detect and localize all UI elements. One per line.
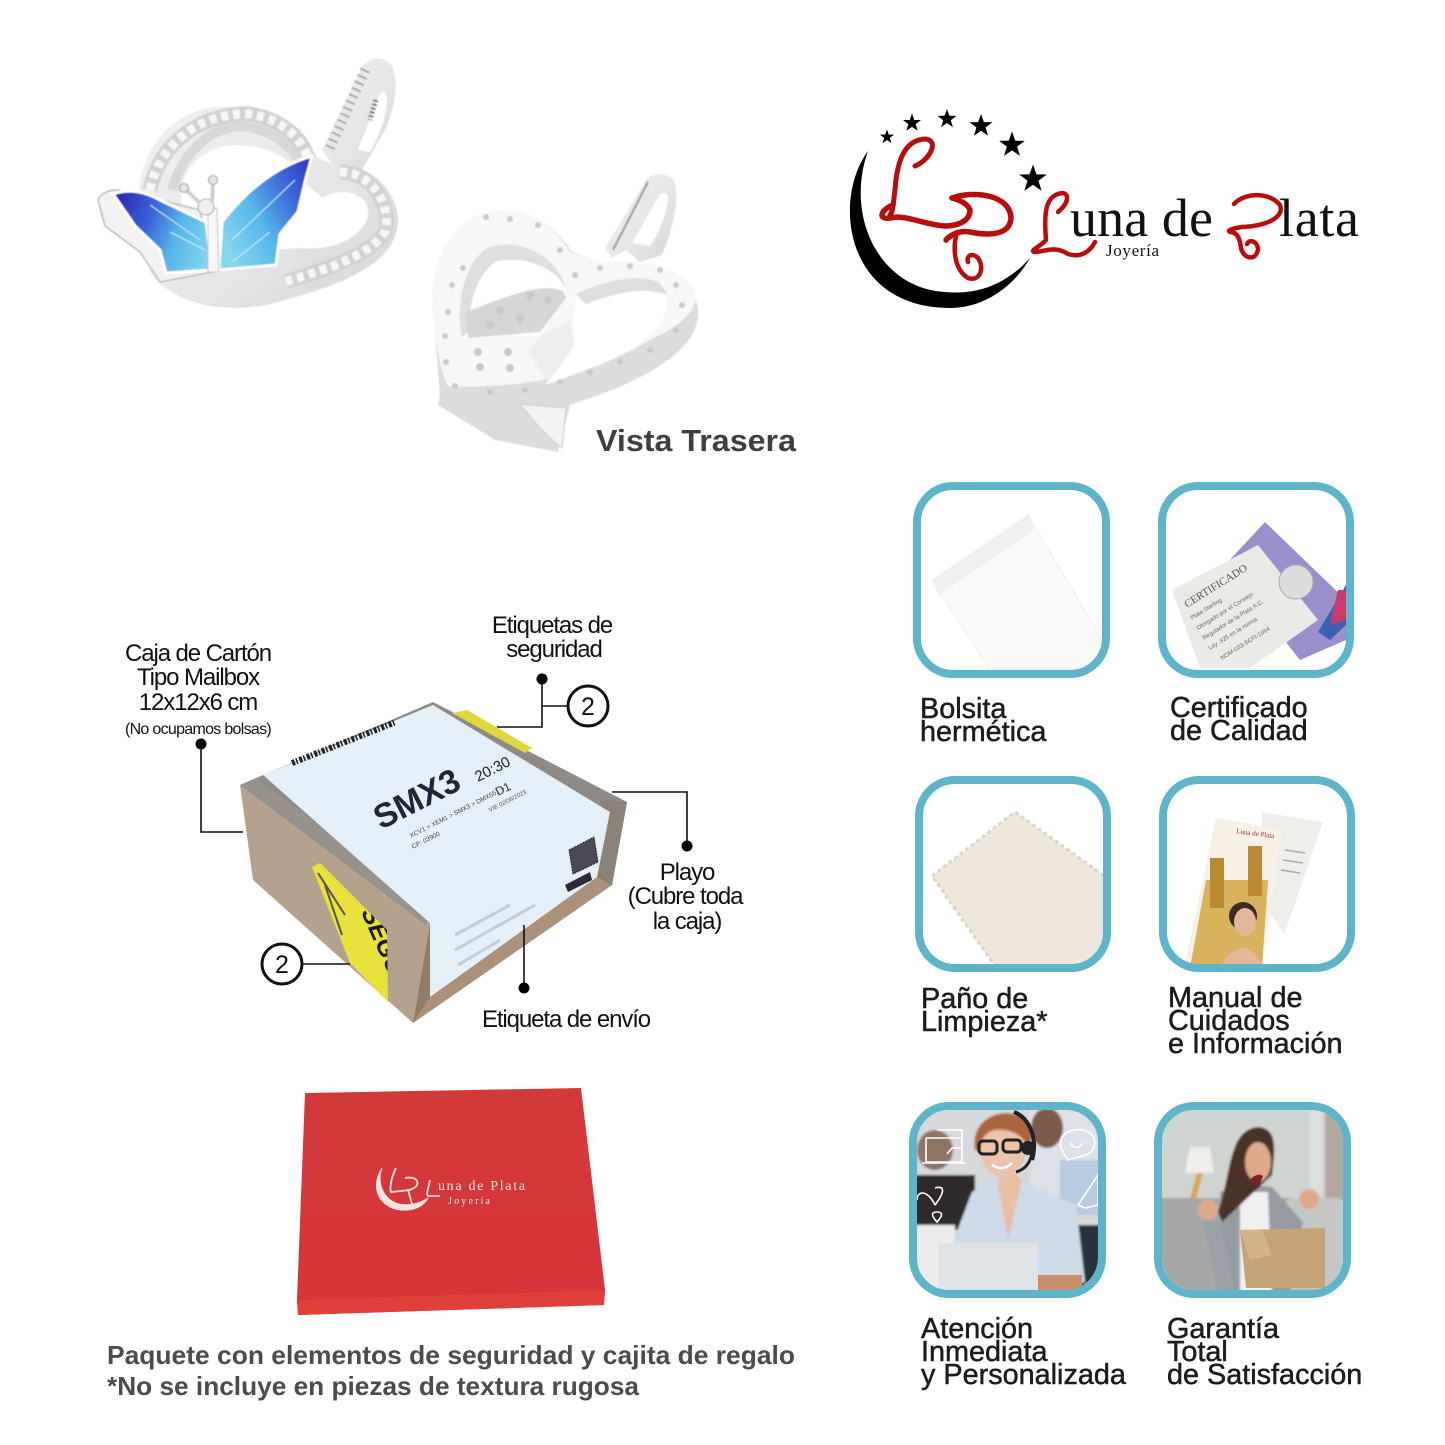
logo: Luna de Plata bbox=[850, 109, 1359, 308]
red gift box bbox=[297, 1088, 605, 1315]
caption: care manual: Cuidados bbox=[1168, 1005, 1290, 1037]
caption: satisfaction guarantee: Garantía bbox=[1167, 1313, 1280, 1345]
caption: personal attention: y Personalizada bbox=[921, 1359, 1127, 1391]
count badge: side sticker: 2 bbox=[275, 951, 289, 979]
tile: certificate: Regulador de la Plata A.C. bbox=[1202, 599, 1265, 642]
caption: cleaning cloth bbox=[921, 983, 1047, 1038]
caption: hermetic bag: Bolsita bbox=[920, 693, 1007, 725]
caption: satisfaction guarantee bbox=[1167, 1313, 1362, 1391]
label: cardboard box: Tipo Mailbox bbox=[137, 664, 260, 691]
caption: personal attention bbox=[921, 1313, 1127, 1391]
caption: certificate: Certificado bbox=[1170, 692, 1308, 724]
logo red monogram LP bbox=[882, 139, 1281, 279]
caption: care manual: e Información bbox=[1168, 1028, 1342, 1060]
label: shipping label: Etiqueta de envío bbox=[482, 1006, 651, 1033]
caption: cleaning cloth: Limpieza* bbox=[921, 1006, 1047, 1038]
label: cardboard box: 12x12x6 cm bbox=[139, 689, 257, 716]
gift box silver logo: Joyería bbox=[448, 1196, 491, 1207]
leader: plastic wrap bbox=[612, 792, 692, 852]
count badge: side sticker bbox=[262, 944, 302, 984]
tile: care manual: Luna de Plata bbox=[1236, 827, 1276, 840]
caption: cleaning cloth: Paño de bbox=[921, 983, 1028, 1015]
logo crescent moon bbox=[850, 151, 1030, 308]
caption: hermetic bag: hermética bbox=[920, 716, 1047, 748]
tile: personal attention photo bbox=[913, 1106, 1102, 1294]
cardboard box photo: XCV1 > XEM1 > SMX3 > DMX551 > bbox=[409, 786, 506, 840]
cardboard box photo: VIE 02/06/2023 bbox=[488, 789, 528, 814]
label: plastic wrap: Playo bbox=[660, 859, 715, 886]
cardboard box photo: SMX3 bbox=[367, 762, 467, 837]
caption: back view: Vista Trasera bbox=[596, 423, 797, 458]
logo tagline: Joyería bbox=[1106, 241, 1159, 260]
tile: certificate bbox=[1162, 486, 1350, 674]
tile: certificate: Plata Sterling bbox=[1190, 598, 1223, 622]
label: security stickers: seguridad bbox=[506, 636, 602, 663]
tile: cleaning cloth bbox=[919, 780, 1110, 970]
caption: care manual: Manual de bbox=[1168, 982, 1302, 1014]
caption: satisfaction guarantee: Total bbox=[1167, 1336, 1228, 1368]
note: package contents bbox=[107, 1340, 795, 1401]
logo stars bbox=[880, 109, 1047, 191]
label: cardboard box: Caja de Cartón bbox=[125, 640, 271, 667]
logo wordmark end: lata bbox=[1279, 188, 1359, 248]
leader: security stickers bbox=[497, 674, 568, 727]
caption: hermetic bag bbox=[920, 693, 1047, 748]
leader: cardboard box bbox=[196, 738, 243, 832]
leader: side sticker bbox=[303, 963, 350, 965]
leader: shipping label bbox=[518, 925, 530, 994]
cardboard box photo: 20:30 bbox=[472, 753, 513, 786]
label: cardboard box bbox=[125, 640, 271, 738]
note: package contents: *No se incluye en piezas de textura rugosa bbox=[107, 1371, 640, 1401]
cardboard box photo: Bolsa bbox=[376, 891, 396, 918]
cardboard box photo: CP: 03900 bbox=[411, 830, 442, 851]
caption: care manual bbox=[1168, 982, 1342, 1060]
label: cardboard box: (No ocupamos bolsas) bbox=[125, 721, 271, 738]
caption: certificate bbox=[1170, 692, 1308, 747]
cardboard box photo bbox=[240, 702, 627, 1023]
package diagram bbox=[125, 612, 744, 1033]
gift box silver logo bbox=[376, 1168, 526, 1210]
tile: certificate: CERTIFICADO bbox=[1182, 562, 1250, 611]
tile: certificate: Otorgado por el Consejo bbox=[1196, 592, 1255, 632]
tile: certificate: NOM-033-SCFI-1994 bbox=[1220, 626, 1272, 662]
tile: hermetic bag bbox=[917, 486, 1106, 674]
count badge: top sticker: 2 bbox=[581, 693, 595, 721]
label: security stickers: Etiquetas de bbox=[492, 612, 613, 639]
cardboard box photo: D1 bbox=[493, 779, 513, 799]
caption: certificate: de Calidad bbox=[1170, 715, 1308, 747]
count badge: top sticker bbox=[568, 686, 608, 726]
pendant: back view bbox=[433, 174, 698, 452]
caption: personal attention: Atención bbox=[921, 1313, 1033, 1345]
label: plastic wrap: la caja) bbox=[653, 908, 721, 935]
logo wordmark: una de bbox=[1070, 188, 1213, 248]
label: security stickers bbox=[492, 612, 613, 663]
tile: care manual bbox=[1163, 780, 1351, 968]
label: plastic wrap: (Cubre toda bbox=[628, 883, 744, 910]
caption: satisfaction guarantee: de Satisfacción bbox=[1167, 1359, 1362, 1391]
label: plastic wrap bbox=[628, 859, 744, 935]
gift box silver logo: una de Plata bbox=[438, 1179, 526, 1194]
note: package contents: Paquete con elementos de seguridad y cajita de regalo bbox=[107, 1340, 795, 1370]
caption: personal attention: Inmediata bbox=[921, 1336, 1048, 1368]
tile: certificate: Ley .925 en la norma bbox=[1208, 616, 1259, 652]
cardboard box photo: SEGUR bbox=[356, 903, 417, 996]
pendant: front view with butterfly bbox=[98, 58, 398, 308]
tile: satisfaction guarantee photo bbox=[1158, 1106, 1347, 1294]
